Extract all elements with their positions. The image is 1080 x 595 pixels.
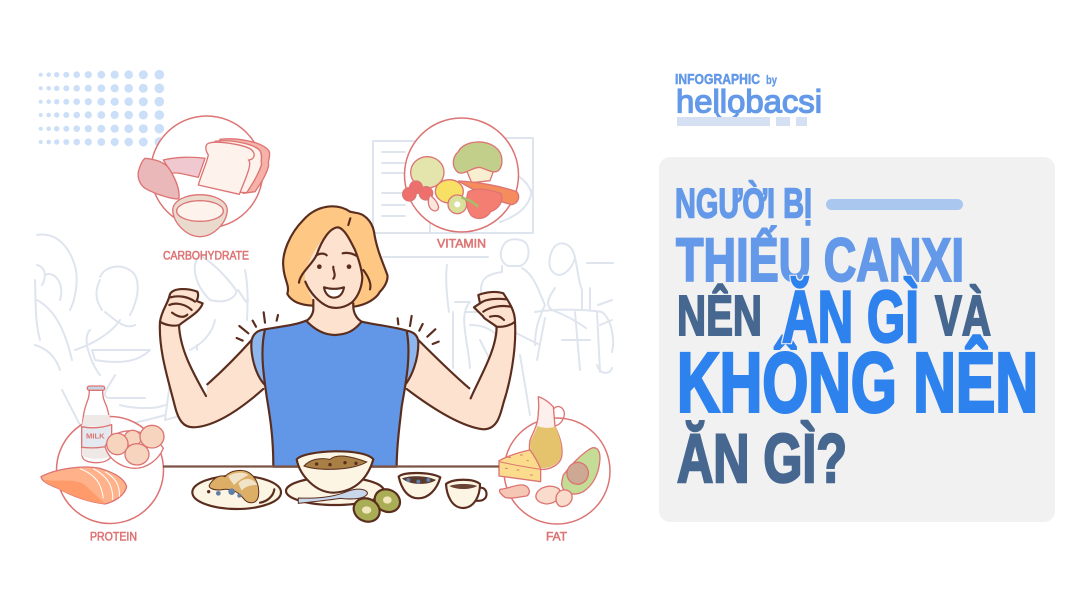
flex marks — [237, 312, 439, 344]
icon: sweet potato, bread and rice bowl — [138, 139, 270, 237]
label: fat: FAT — [546, 530, 567, 544]
title heading: ĂN GÌ — [782, 276, 919, 358]
hellobacsi logo — [675, 72, 822, 126]
title heading: THIẾU CANXI — [676, 226, 964, 294]
circle: carbohydrate — [138, 116, 270, 237]
right arm — [405, 292, 515, 429]
small bowl of berries — [399, 473, 440, 498]
hair — [283, 206, 388, 307]
circle: protein — [41, 386, 164, 524]
hellobacsi logo: by — [766, 75, 777, 87]
icon: milk, eggs and salmon: MILK — [86, 432, 105, 441]
icon: fruit and vegetables — [403, 142, 519, 218]
title heading: NGƯỜI BỊ — [675, 180, 812, 226]
title heading: NÊN — [677, 283, 762, 348]
coffee cup — [446, 480, 487, 508]
dot pattern — [39, 70, 164, 147]
hellobacsi logo: INFOGRAPHIC — [675, 72, 760, 88]
label: carbohydrate: CARBOHYDRATE — [163, 250, 249, 262]
left arm — [160, 289, 265, 427]
title heading: VÀ — [935, 284, 991, 348]
woman flexing arms — [160, 206, 515, 467]
circle: fat — [499, 397, 610, 524]
face details — [317, 264, 351, 298]
icon: oil jug, cheese, avocado and nuts — [499, 397, 600, 507]
circle: vitamin — [403, 118, 519, 232]
title panel — [659, 157, 1055, 522]
table edge — [163, 465, 499, 468]
title heading — [675, 180, 1038, 497]
croissant plate — [192, 470, 281, 509]
label: protein: PROTEIN — [90, 530, 137, 544]
face and neck — [305, 227, 363, 335]
blue shirt — [251, 321, 418, 467]
hellobacsi logo: hellobacsi — [676, 84, 822, 120]
label: vitamin: VITAMIN — [437, 238, 486, 250]
title heading: ĂN GÌ? — [677, 420, 847, 497]
bowl, spoon and kiwi — [286, 451, 404, 526]
